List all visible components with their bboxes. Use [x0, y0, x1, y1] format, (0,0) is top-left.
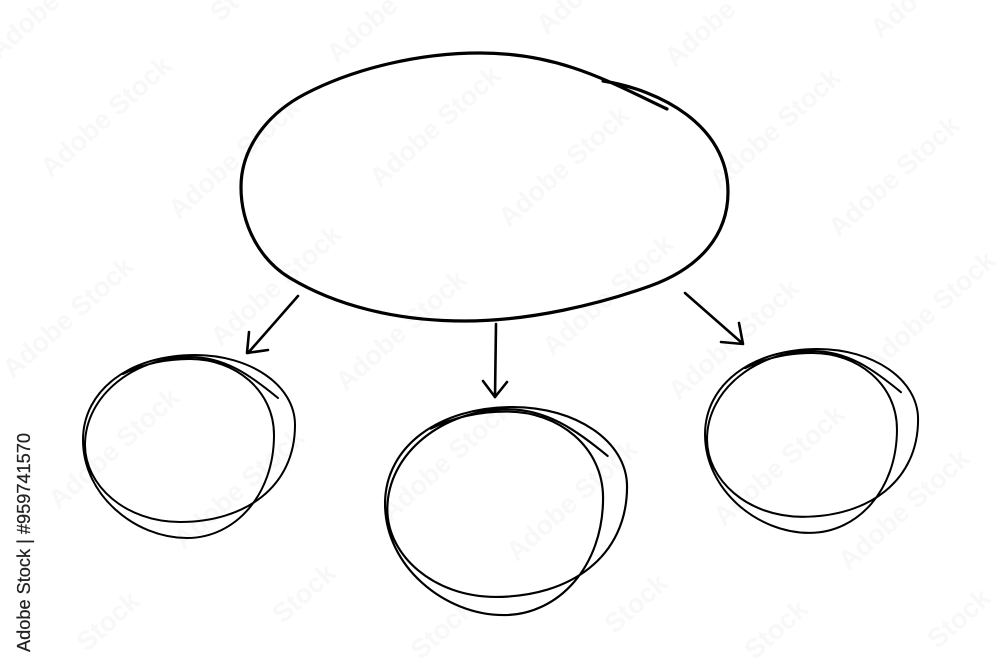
background watermark pattern: Stock: [739, 593, 814, 665]
right scribbled circle: [705, 349, 918, 533]
background watermark pattern: Adobe Stock: [663, 272, 806, 406]
background watermark pattern: Adobe Stock: [823, 109, 966, 243]
background watermark pattern: Stock: [71, 585, 146, 657]
background watermark pattern: Stock: [599, 567, 674, 639]
background watermark pattern: Stock: [922, 582, 997, 654]
background watermark pattern: Adobe Stock: [330, 263, 473, 397]
middle scribbled circle: [385, 407, 627, 615]
background watermark pattern: Adobe Stock: [205, 218, 348, 352]
arrow: to right circle: [685, 293, 743, 344]
background watermark pattern: Adobe Stock: [493, 99, 636, 233]
background watermark pattern: Adobe Stock: [168, 421, 311, 555]
background watermark pattern: Adobe Stock: [859, 244, 1000, 378]
arrow: to left circle: [247, 296, 298, 353]
background watermark pattern: Adobe Stock: [501, 433, 644, 567]
background watermark pattern: Adobe Stock: [375, 393, 518, 527]
background watermark pattern: Stock: [267, 557, 342, 629]
background watermark pattern: Adobe Stock: [0, 250, 140, 384]
arrow: to middle circle: [483, 324, 507, 397]
background watermark pattern: Adobe Stock: [35, 49, 178, 183]
stock image id caption: Adobe Stock | #959741570: [14, 433, 34, 652]
large top oval: [241, 53, 728, 321]
background watermark pattern: Adobe Stock: [537, 228, 680, 362]
background watermark pattern: Adobe Stock: [833, 442, 976, 576]
left scribbled circle: [83, 355, 295, 538]
background watermark pattern: Adobe Stock: [708, 398, 851, 532]
background watermark pattern: Adobe Stock: [364, 59, 507, 193]
background watermark pattern: Adobe Stock: [704, 61, 847, 195]
background watermark pattern: Adobe Stock: [163, 91, 306, 225]
background watermark pattern: Adobe Stock: [43, 381, 186, 515]
background watermark pattern: Stock: [405, 593, 480, 665]
